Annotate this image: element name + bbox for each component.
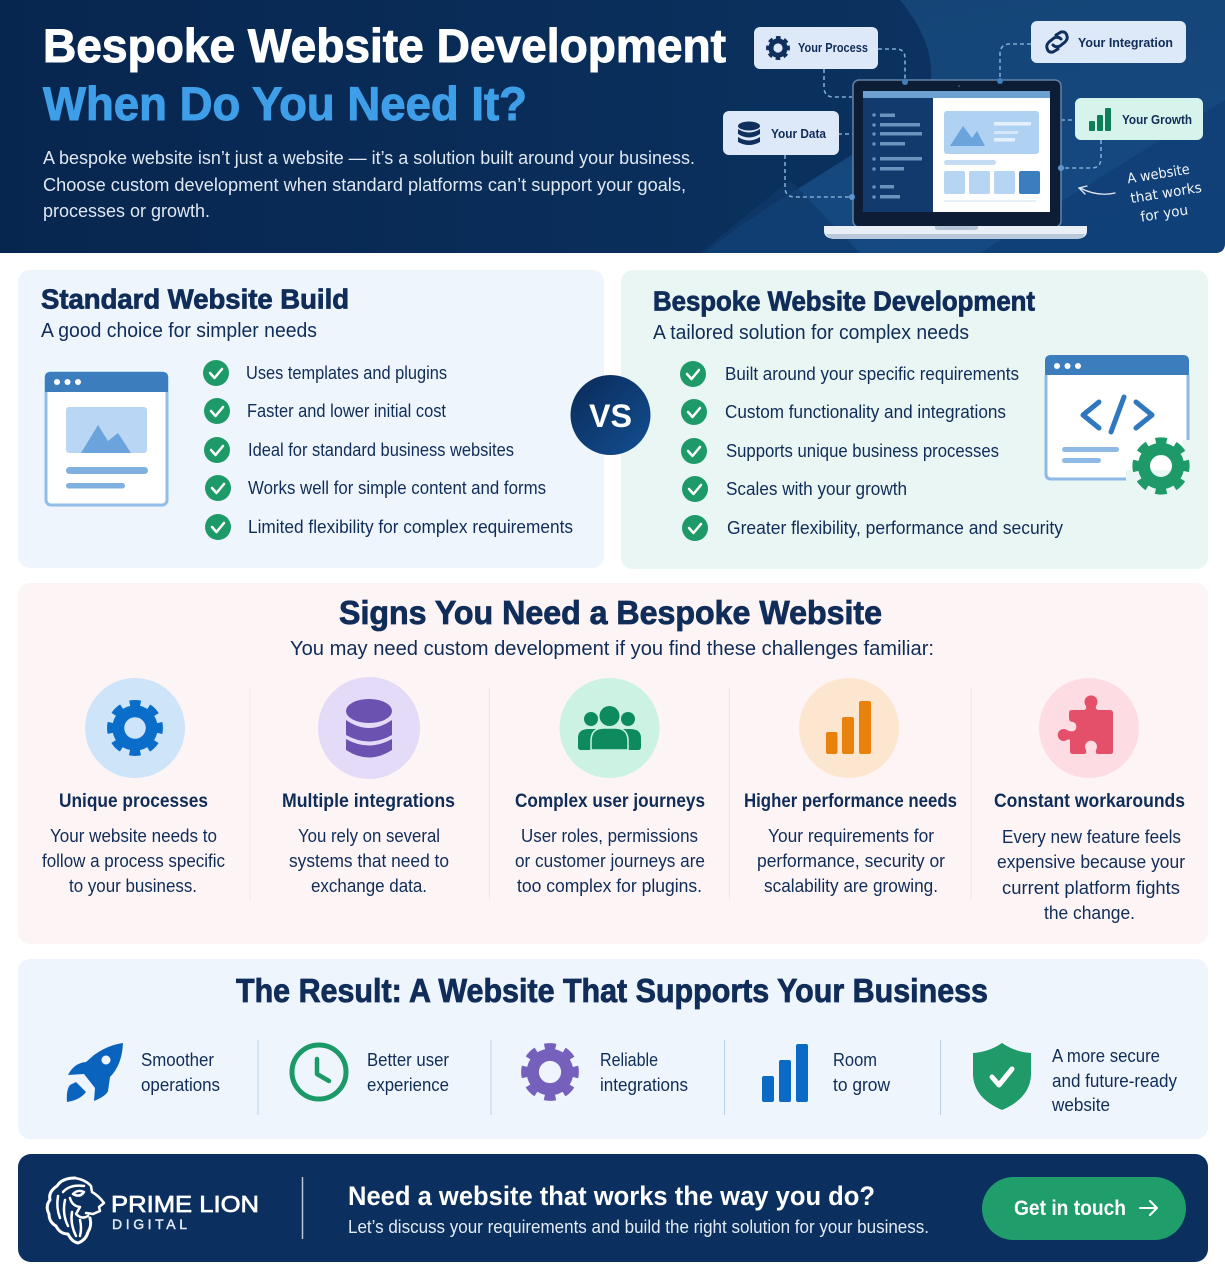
checklist: standard: Works well for simple content and forms	[248, 478, 546, 498]
card: higher performance needs: performance, security or	[757, 851, 945, 871]
checklist: bespoke: Scales with your growth	[726, 479, 907, 499]
card: complex user journeys	[515, 678, 705, 896]
checklist: standard	[203, 360, 573, 540]
heading: standard: Standard Website Build	[41, 284, 349, 314]
tag: your integration	[1031, 21, 1186, 63]
icon: rocket	[67, 1043, 123, 1102]
panel: signs you need a bespoke website	[18, 583, 1208, 944]
icon: orange bars	[826, 701, 871, 754]
card: constant workarounds: the change.	[1044, 903, 1135, 923]
logo: prime lion digital	[47, 1178, 259, 1243]
card: higher performance needs: Your requirements for	[768, 826, 934, 846]
icon: template window	[45, 372, 168, 505]
panel: bespoke website development	[621, 270, 1208, 569]
laptop illustration	[824, 78, 1087, 239]
tag: your process: Your Process	[798, 41, 868, 55]
intro paragraph: processes or growth.	[43, 200, 210, 221]
subtitle question: When Do You Need It?	[43, 77, 527, 130]
checklist: bespoke: Supports unique business processes	[726, 441, 999, 461]
result: secure and future-ready: website	[1051, 1095, 1110, 1115]
icon: shield	[973, 1043, 1031, 1110]
icon: purple database	[346, 699, 392, 758]
card: constant workarounds: Constant workarounds	[994, 791, 1185, 812]
header banner	[0, 0, 1225, 253]
checklist: bespoke: Greater flexibility, performance and security	[727, 518, 1063, 538]
card: complex user journeys: or customer journeys are	[515, 851, 705, 871]
card: multiple integrations: Multiple integrations	[282, 791, 455, 812]
card: constant workarounds: Every new feature feels	[1002, 827, 1181, 847]
card: unique processes: follow a process specific	[42, 851, 225, 871]
icon: growth bars	[1089, 108, 1111, 131]
card: higher performance needs	[744, 678, 957, 896]
call to action bar	[18, 1154, 1208, 1262]
connector lines	[785, 44, 1101, 197]
heading: signs: Signs You Need a Bespoke Website	[339, 594, 882, 631]
result: room to grow: Room	[833, 1050, 877, 1070]
icon: purple gear	[520, 1042, 580, 1102]
button: get in touch	[982, 1177, 1186, 1240]
button: get in touch: Get in touch	[1014, 1197, 1126, 1220]
card: higher performance needs: scalability are growing.	[764, 876, 938, 896]
checklist: standard: Limited flexibility for complex requirements	[248, 517, 573, 537]
result: secure and future-ready: A more secure	[1052, 1046, 1160, 1066]
cta text: Let’s discuss your requirements and build the right solution for your business.	[348, 1217, 929, 1237]
checklist: standard: Ideal for standard business websites	[248, 440, 514, 460]
icon: lion head	[47, 1178, 104, 1243]
tag: your data: Your Data	[771, 127, 827, 141]
tag: your process	[754, 27, 878, 69]
result: secure and future-ready	[973, 1043, 1177, 1115]
checklist: standard: Uses templates and plugins	[246, 363, 447, 383]
intro paragraph	[43, 147, 695, 221]
icon: code window with gear	[1045, 355, 1192, 496]
icon: blue bars	[762, 1044, 808, 1102]
result: room to grow	[762, 1044, 891, 1102]
card: unique processes: Your website needs to	[50, 826, 217, 846]
result: reliable integrations: Reliable	[600, 1050, 658, 1070]
handwritten note with arrow: that works	[1129, 180, 1203, 207]
tag: your data	[723, 111, 839, 155]
intro paragraph: Choose custom development when standard platforms can’t support your goals,	[43, 174, 686, 195]
card: multiple integrations	[282, 677, 455, 896]
panel: the result	[18, 959, 1208, 1139]
result: smoother operations: operations	[141, 1075, 220, 1095]
result: room to grow: to grow	[833, 1075, 891, 1095]
result: secure and future-ready: and future-ready	[1052, 1071, 1177, 1091]
icon: clock	[292, 1045, 346, 1099]
cta text	[348, 1181, 929, 1237]
intro paragraph: A bespoke website isn’t just a website — it’s a solution built around your business.	[43, 147, 695, 168]
card: higher performance needs: Higher performance needs	[744, 791, 957, 812]
handwritten note with arrow	[1079, 160, 1206, 227]
tag: your growth	[1075, 98, 1203, 140]
card: multiple integrations: You rely on several	[298, 826, 440, 846]
main title: Bespoke Website Development	[43, 19, 726, 72]
icon: database	[738, 122, 760, 145]
subheading: standard: A good choice for simpler needs	[41, 320, 317, 342]
heading: bespoke: Bespoke Website Development	[653, 286, 1035, 316]
panel: standard website build	[18, 270, 604, 568]
card: constant workarounds: expensive because your	[997, 852, 1185, 872]
result: better user experience: Better user	[367, 1050, 449, 1070]
result: reliable integrations: integrations	[600, 1075, 688, 1095]
result: better user experience: experience	[367, 1075, 449, 1095]
result: smoother operations: Smoother	[141, 1050, 214, 1070]
handwritten note with arrow: for you	[1139, 202, 1189, 226]
subheading: bespoke: A tailored solution for complex needs	[653, 322, 969, 344]
tag: your integration: Your Integration	[1078, 36, 1173, 50]
card: complex user journeys: User roles, permissions	[521, 826, 698, 846]
tag: your growth: Your Growth	[1122, 113, 1192, 127]
card: constant workarounds	[994, 678, 1185, 923]
card: unique processes: to your business.	[69, 876, 197, 896]
checklist: bespoke: Custom functionality and integrations	[725, 402, 1006, 422]
handwritten note with arrow: A website	[1126, 162, 1191, 187]
checklist: standard: Faster and lower initial cost	[247, 401, 446, 421]
vs badge: VS	[589, 398, 632, 434]
card: multiple integrations: systems that need to	[289, 851, 449, 871]
checklist: bespoke	[680, 361, 1063, 541]
result: reliable integrations	[520, 1042, 688, 1102]
cta text: Need a website that works the way you do?	[348, 1181, 875, 1211]
icon: chain link	[1047, 32, 1067, 52]
card: unique processes	[42, 678, 225, 896]
vs badge	[570, 375, 650, 455]
card: complex user journeys: too complex for plugins.	[517, 876, 702, 896]
card: complex user journeys: Complex user journeys	[515, 791, 705, 812]
icon: puzzle piece	[1058, 695, 1113, 754]
icon: blue gear	[106, 699, 164, 757]
subheading: signs: You may need custom development if you find these challenges familiar:	[290, 637, 934, 660]
result: smoother operations	[67, 1043, 220, 1102]
icon: gear	[765, 35, 791, 61]
logo: prime lion digital: PRIME LION	[111, 1191, 259, 1217]
icon: group of people	[578, 706, 641, 750]
card: multiple integrations: exchange data.	[311, 876, 427, 896]
card: constant workarounds: current platform fights	[1002, 878, 1180, 898]
card: unique processes: Unique processes	[59, 791, 208, 812]
logo: prime lion digital: DIGITAL	[112, 1216, 187, 1232]
heading: result: The Result: A Website That Supports Your Business	[236, 972, 988, 1009]
result: better user experience	[292, 1045, 449, 1099]
checklist: bespoke: Built around your specific requirements	[725, 364, 1019, 384]
